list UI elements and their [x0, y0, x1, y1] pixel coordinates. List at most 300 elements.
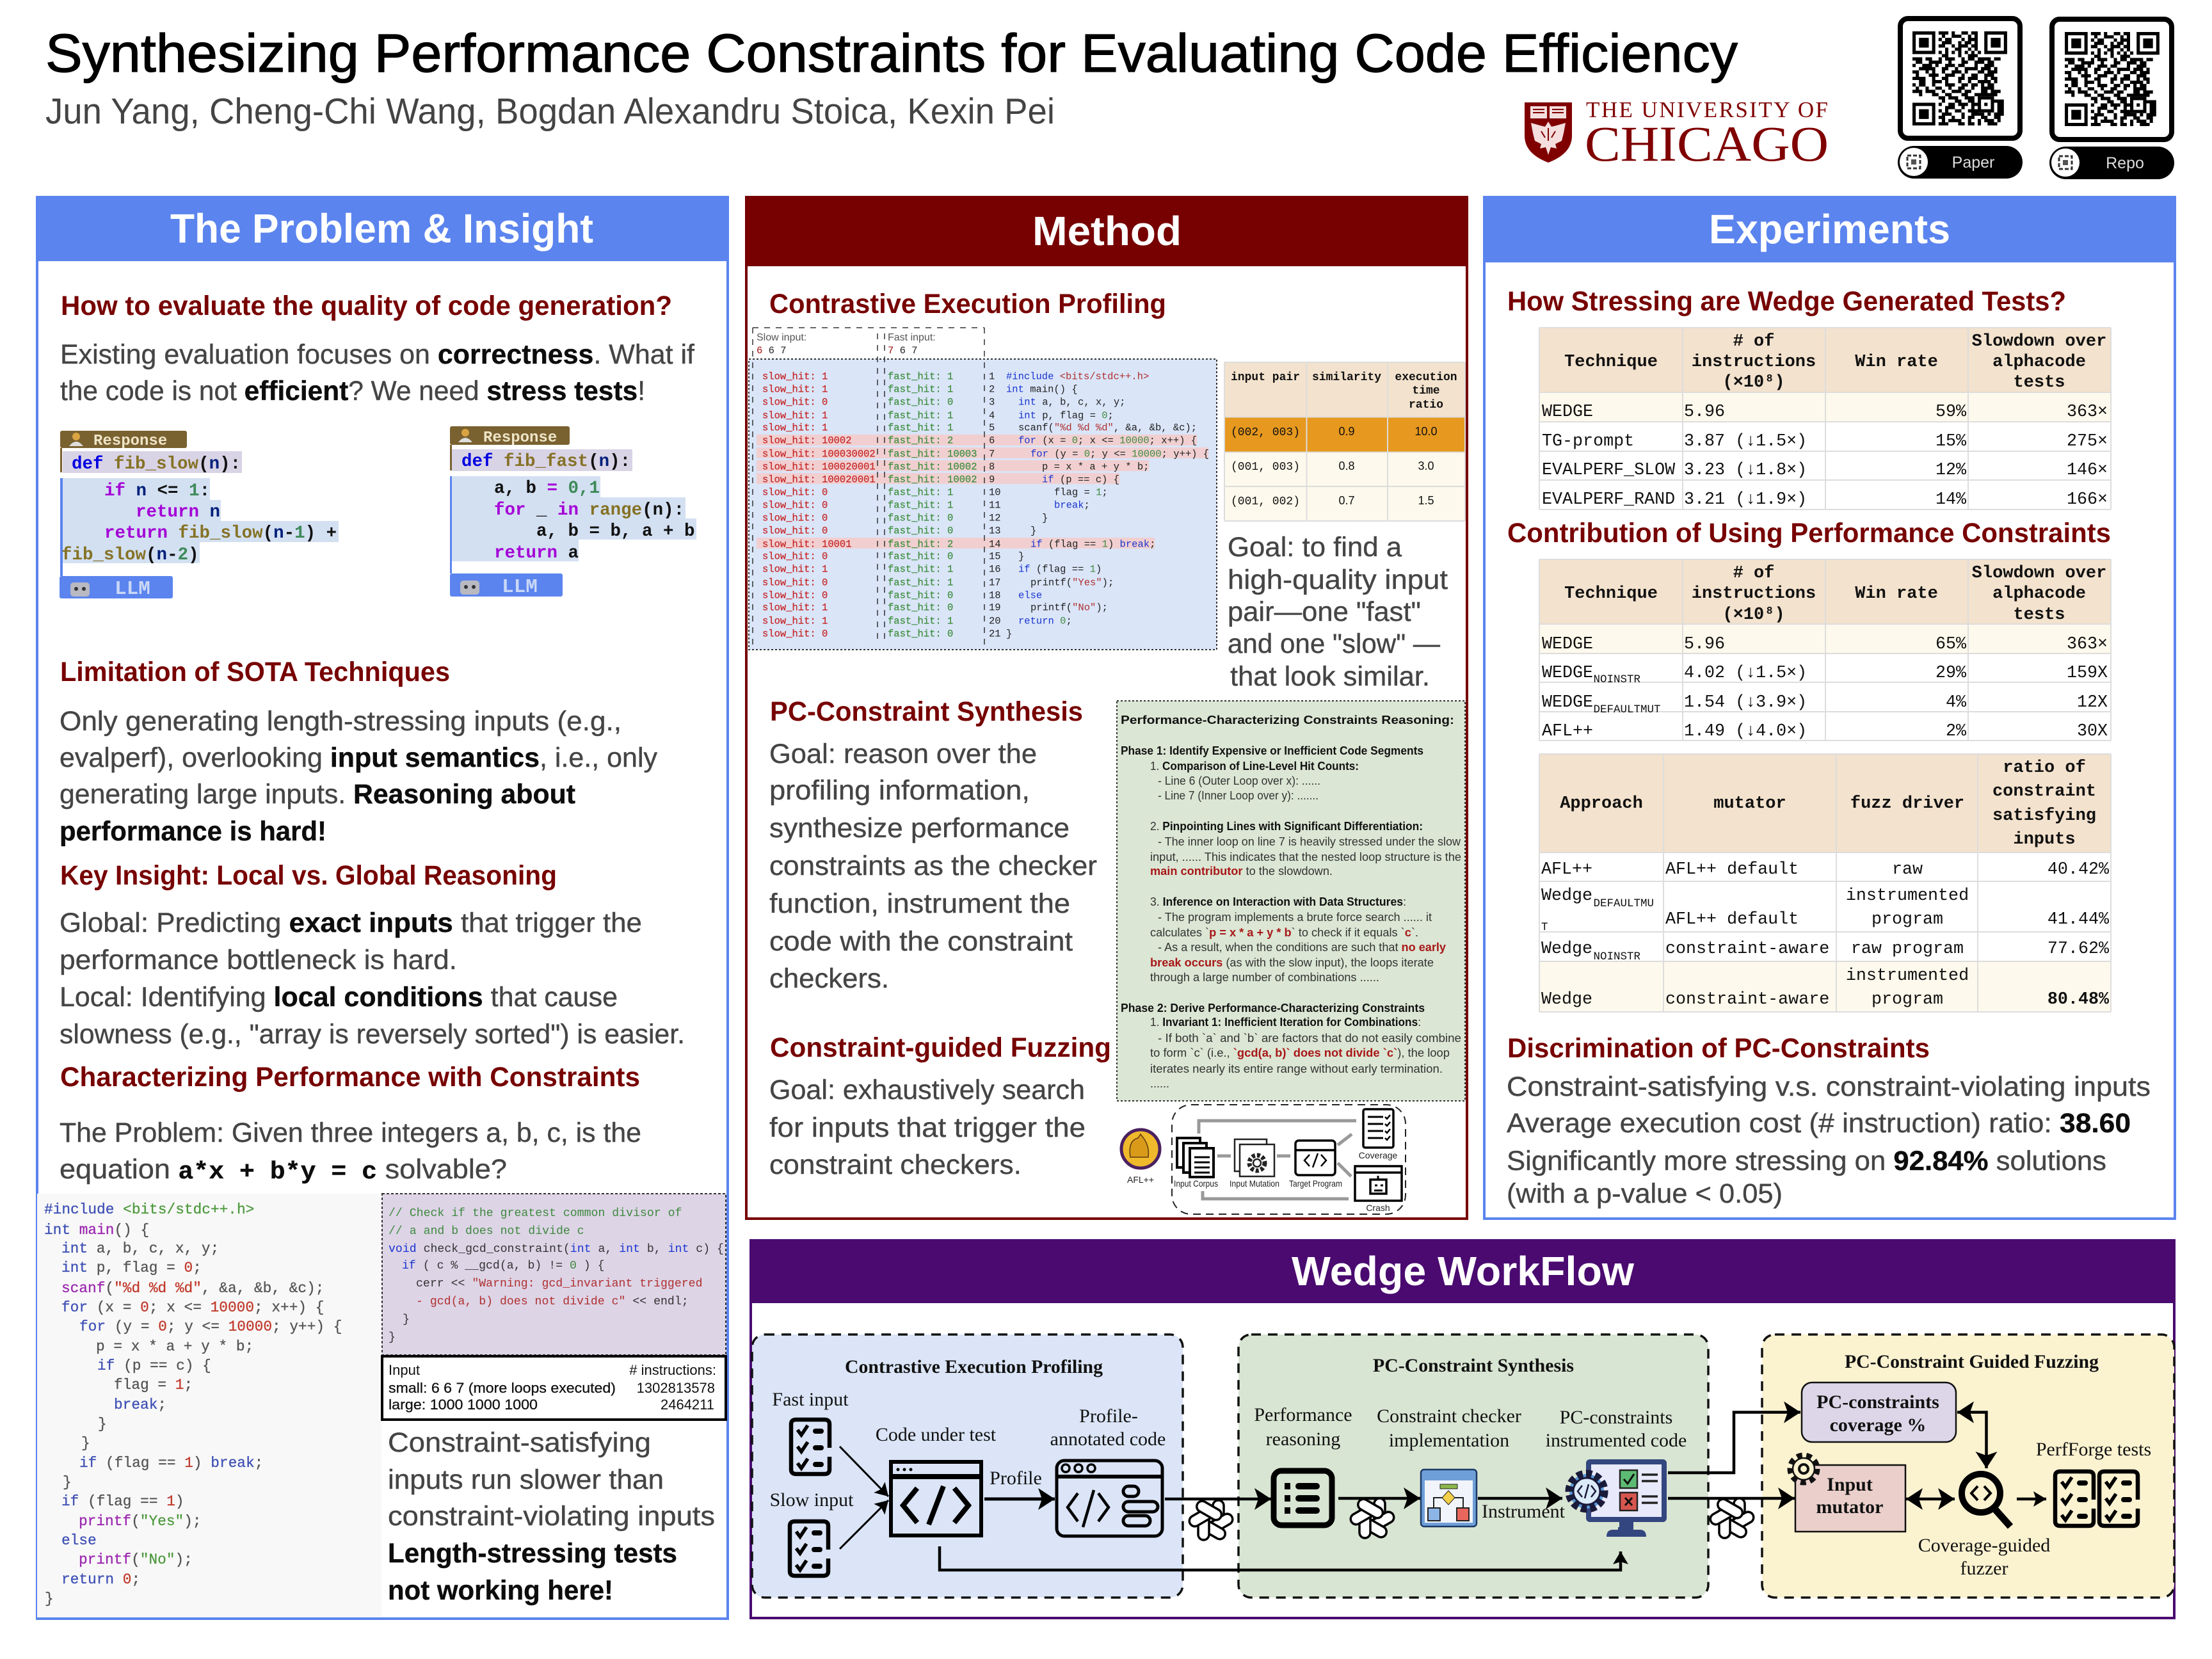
annotated source code: 9: [989, 474, 995, 485]
table: stressing results: [1539, 328, 2111, 509]
table: constraint satisfying ratio: instrumented: [1846, 966, 1969, 986]
table: input pair ranking: (002, 003): [1231, 426, 1300, 439]
fast hit counts: fast_hit: 0: [888, 550, 953, 562]
table: contribution results: 159X: [2067, 664, 2108, 683]
table: constraint satisfying ratio: 41.44%: [2048, 910, 2110, 929]
annotated source code: int a, b, c, x, y;: [1018, 397, 1125, 408]
panel: llm reasoning example: calculates `p = x * a + y * b` to check if it equals `c`.: [1150, 926, 1418, 939]
table: contribution results: WEDGE: [1542, 635, 1593, 654]
label: pc-constraints instrumented code: PC-constraints: [1560, 1407, 1672, 1428]
icon: coverage: [1359, 1109, 1398, 1160]
label: fast input: Fast input: [772, 1389, 849, 1410]
text block: constraint-satisfying: inputs run slower than: [388, 1464, 664, 1495]
panel: llm reasoning example: [1117, 701, 1465, 1101]
panel: llm reasoning example: - As a result, when the conditions are such that no early: [1158, 941, 1446, 954]
fast hit counts: fast_hit: 0: [888, 397, 953, 408]
label: profile: Profile: [990, 1468, 1042, 1489]
text block: synthesis goal: synthesize performance: [769, 813, 1070, 844]
icon: perfforge checklists: [2055, 1471, 2138, 1526]
code block: gcd constraint checker: - gcd(a, b) does not divide c" << endl;: [416, 1295, 689, 1308]
panel header: Experiments: [1709, 206, 1950, 252]
pill label: Repo: [2106, 154, 2144, 172]
annotated source code: 16: [989, 563, 1001, 575]
text block: discrimination results: Average execution cost (# instruction) ratio: 38.60: [1507, 1108, 2131, 1139]
heading: how to evaluate: How to evaluate the quality of code generation?: [61, 291, 672, 321]
table: constraint satisfying ratio: Approach: [1560, 794, 1643, 813]
code block: example program: else: [61, 1532, 97, 1549]
table: constraint satisfying ratio: 40.42%: [2048, 860, 2110, 879]
code block: gcd constraint checker: // a and b does not divide c: [389, 1225, 584, 1238]
profile: hit counts and code: 6 6 7: [757, 345, 787, 357]
code example: fib_fast: return a: [494, 543, 579, 563]
text block: goal: pair—one "fast": [1228, 597, 1421, 627]
table: contribution results: NOINSTR: [1594, 673, 1641, 686]
table: contribution results: tests: [2013, 605, 2065, 625]
logo: University of Chicago: [1525, 97, 1829, 172]
annotated source code: }: [1030, 525, 1036, 536]
table: contribution results: (×10⁸): [1722, 605, 1785, 625]
annotated source code: 15: [989, 550, 1001, 562]
annotated source code: 1: [989, 371, 995, 383]
feedback arrows: [1199, 1121, 1356, 1199]
annotated source code: printf("No");: [1030, 602, 1108, 613]
fast hit counts: fast_hit: 1: [888, 616, 953, 627]
table: input vs instructions: small: 6 6 7 (more loops executed): [389, 1380, 616, 1396]
panel: llm reasoning example: input, ...... This indicates that the nested loop structure is the: [1150, 851, 1461, 863]
panel: experiments: [1483, 196, 2176, 1219]
label: performance reasoning: reasoning: [1266, 1429, 1340, 1450]
text block: synthesis goal: code with the constraint: [769, 926, 1073, 957]
fast hit counts: fast_hit: 2: [888, 435, 953, 447]
table: contribution results: Slowdown over: [1972, 564, 2106, 583]
panel: llm reasoning example: - The program implements a brute force search ...... it: [1158, 911, 1432, 924]
text block: the problem: The Problem: Given three integers a, b, c, is the: [60, 1118, 641, 1148]
slow hit counts: slow_hit: 0: [762, 525, 828, 536]
text block: limitation: performance is hard!: [60, 816, 326, 847]
table: stressing results: Slowdown over: [1972, 332, 2106, 351]
table: input pair ranking: 3.0: [1418, 460, 1434, 472]
panel frame: [746, 197, 1467, 1219]
icon: annotated code window: [1057, 1461, 1162, 1536]
fast hit counts: fast_hit: 0: [888, 602, 953, 613]
annotated source code: flag = 1;: [1054, 486, 1108, 498]
icon: checker flow window: [1421, 1470, 1477, 1527]
table: stressing results: (×10⁸): [1722, 373, 1785, 392]
table: contribution results: Win rate: [1855, 584, 1938, 604]
table: stressing results: TG-prompt: [1542, 432, 1634, 451]
text block: limitation: [60, 706, 657, 847]
code block: gcd constraint checker: }: [389, 1331, 396, 1344]
code block: example program: printf("No");: [79, 1551, 193, 1568]
text block: global vs local: Global: Predicting exact inputs that trigger the: [60, 908, 642, 938]
table: stressing results: instructions: [1692, 353, 1816, 372]
slow hit counts: slow_hit: 1: [762, 384, 828, 396]
label: coverage-guided fuzzer: fuzzer: [1960, 1558, 2008, 1579]
QR pattern: [2065, 32, 2160, 126]
annotated source code: 3: [989, 397, 995, 408]
table: contribution results: 65%: [1936, 635, 1967, 654]
annotated source code: 5: [989, 422, 995, 434]
heading: pc-constraint synthesis: PC-Constraint Synthesis: [770, 696, 1083, 727]
label: code under test: Code under test: [876, 1424, 997, 1445]
fast hit counts: fast_hit: 1: [888, 371, 953, 383]
text block: the problem: equation a*x + b*y = c solvable?: [60, 1154, 507, 1186]
slow hit counts: slow_hit: 1: [762, 371, 828, 383]
code block: example program: int p, flag = 0;: [61, 1260, 202, 1276]
table: stressing results: 146×: [2067, 461, 2108, 480]
table: stressing results: Win rate: [1855, 353, 1938, 372]
table: constraint satisfying ratio: instrumented: [1846, 886, 1969, 906]
panel: llm reasoning example: 1. Comparison of Line-Level Hit Counts:: [1150, 760, 1359, 773]
panel: llm reasoning example: - If both `a` and `b` are factors that do not easily combine: [1158, 1032, 1461, 1045]
text block: correctness: Existing evaluation focuses on correctness. What if: [60, 339, 695, 370]
icon: llm step one: [1187, 1499, 1235, 1541]
code example: fib_slow: if n <= 1:: [104, 481, 210, 501]
table: contribution results: 1.54 (↓3.9×): [1684, 693, 1807, 712]
fast hit counts: fast_hit: 1: [888, 410, 953, 421]
code block: gcd constraint checker: // Check if the greatest common divisor of: [389, 1207, 682, 1220]
stage: pc-constraint synthesis: [1238, 1334, 1708, 1598]
arrow: coverage feedback: [1957, 1412, 1987, 1468]
code block: gcd constraint checker: if ( c % __gcd(a, b) != 0 ) {: [402, 1260, 605, 1272]
panel frame: [1484, 197, 2175, 1219]
code example: fib_fast: [450, 426, 696, 598]
annotated source code: 2: [989, 384, 995, 396]
arrow: code under test to instrumented: [940, 1546, 1621, 1570]
table: stressing results: 3.87 (↓1.5×): [1684, 432, 1807, 451]
panel header: [1483, 196, 2176, 262]
title: Synthesizing Performance Constraints for Evaluating Code Efficiency: [45, 23, 1738, 83]
fast hit counts: fast_hit: 0: [888, 525, 953, 536]
table: input pair ranking: time: [1412, 385, 1440, 397]
label: slow input: Slow input: [770, 1489, 854, 1511]
table: stressing results: alphacode: [1992, 353, 2086, 372]
annotated source code: 8: [989, 461, 995, 472]
text block: goal: that look similar.: [1230, 661, 1430, 692]
slow hit counts: slow_hit: 0: [762, 512, 828, 524]
code block: gcd constraint checker: cerr << "Warning: gcd_invariant triggered: [416, 1278, 703, 1290]
annotated source code: 20: [989, 616, 1001, 627]
label: coverage-guided fuzzer: [1918, 1535, 2050, 1579]
table: input pair ranking: execution: [1395, 371, 1457, 384]
slow input: Slow input:: [757, 332, 806, 343]
heading: constraint-guided fuzzing: Constraint-guided Fuzzing: [770, 1032, 1111, 1063]
table: contribution results: # of: [1733, 564, 1774, 583]
slow hit counts: slow_hit: 100020001: [762, 461, 876, 472]
table: constraint satisfying ratio: mutator: [1713, 794, 1786, 813]
icon: AFL++ logo: AFL++: [1127, 1174, 1154, 1185]
code example: fib_slow: fib_slow(n-2): [61, 545, 199, 565]
fast hit counts: [888, 371, 977, 640]
label: performance reasoning: Performance: [1254, 1404, 1352, 1425]
fast hit counts: fast_hit: 2: [888, 539, 953, 550]
label: checker implementation: implementation: [1389, 1430, 1509, 1451]
table: stressing results: 14%: [1936, 490, 1967, 509]
arrow: instrumented to coverage: [1668, 1412, 1800, 1473]
annotated source code: else: [1018, 590, 1042, 602]
LLM tag: LLM: [502, 576, 538, 598]
table: constraint satisfying ratio: NOINSTR: [1594, 950, 1641, 963]
icon: coverage: Coverage: [1359, 1150, 1398, 1160]
pill label: [1898, 146, 2023, 179]
slow hit counts: slow_hit: 0: [762, 397, 828, 408]
text block: limitation: evalperf), overlooking input semantics, i.e., only: [60, 742, 657, 773]
code block: example program: for (y = 0; y <= 10000; y++) {: [79, 1318, 342, 1335]
slow hit counts: slow_hit: 1: [762, 602, 828, 613]
text block: global vs local: slowness (e.g., "array is reversely sorted") is easier.: [60, 1019, 685, 1050]
table: contribution results: 4%: [1946, 693, 1967, 712]
fast hit counts: fast_hit: 10003: [888, 448, 977, 460]
slow hit counts: slow_hit: 10002: [762, 435, 852, 447]
table: input pair ranking: 10.0: [1415, 425, 1438, 438]
table: input pair ranking: 1.5: [1418, 494, 1434, 507]
code block: example program: if (flag == 1): [61, 1493, 184, 1510]
text block: goal: [1228, 532, 1448, 692]
label: profile-annotated code: Profile-: [1079, 1406, 1138, 1427]
annotated source code: printf("Yes");: [1030, 577, 1114, 589]
QR code: repo: [2049, 19, 2174, 179]
icon: code window: [891, 1462, 981, 1535]
icon: crash: Crash: [1366, 1203, 1390, 1213]
text block: synthesis goal: checkers.: [769, 963, 889, 994]
arrow: instrumented to mutator: [1668, 1497, 1795, 1500]
table: input pair ranking: (001, 002): [1231, 495, 1300, 508]
stage: pc-constraint guided fuzzing: [1762, 1334, 2174, 1598]
table: stressing results: WEDGE: [1542, 403, 1593, 422]
icon: slow input checklist: [790, 1521, 828, 1576]
annotated source code: 13: [989, 525, 1001, 536]
icon: shield crest: [1525, 102, 1572, 163]
text block: global vs local: Local: Identifying local conditions that cause: [60, 982, 618, 1013]
table: contribution results: Technique: [1564, 584, 1658, 604]
QR frame: [2052, 19, 2172, 140]
panel header: [749, 1239, 2176, 1303]
text block: correctness: [60, 339, 695, 406]
panel: llm reasoning example: - The inner loop on line 7 is heavily stressed under the slow: [1158, 835, 1461, 848]
icon: input corpus: [1174, 1138, 1218, 1189]
annotated source code: 12: [989, 512, 1001, 524]
panel: llm reasoning example: to form `c` (i.e., `gcd(a, b)` does not divide `c` ), the loop: [1150, 1046, 1450, 1059]
text block: synthesis goal: profiling information,: [769, 775, 1030, 806]
panel header: The Problem & Insight: [170, 205, 593, 252]
table: input pair ranking: 0.7: [1338, 494, 1355, 507]
table: constraint satisfying ratio: Wedge: [1541, 990, 1592, 1009]
text block: fuzzing goal: Goal: exhaustively search: [769, 1075, 1085, 1105]
code block: example program: flag = 1;: [114, 1377, 193, 1393]
code block: example program: return 0;: [61, 1571, 140, 1588]
box: pc-constraints coverage: PC-constraints: [1816, 1391, 1939, 1413]
pill label: Paper: [1952, 154, 1994, 172]
stage title: PC-Constraint Guided Fuzzing: [1845, 1351, 2099, 1372]
table: constraint satisfying ratio: DEFAULTMU: [1594, 897, 1654, 910]
annotated source code: 11: [989, 499, 1001, 511]
icon: magnifier fuzzer: [1962, 1474, 2010, 1527]
table: input vs instructions: # instructions:: [629, 1362, 716, 1378]
annotated source code: if (p == c) {: [1042, 474, 1119, 485]
panel: llm reasoning example: through a large number of combinations ......: [1150, 971, 1379, 984]
panel: llm reasoning example: - Line 7 (Inner Loop over y): .......: [1158, 789, 1318, 802]
panel frame: [37, 197, 728, 1619]
table: input pair ranking: (001, 003): [1231, 461, 1300, 474]
response tag: Response: [93, 433, 167, 450]
icon: crash: [1355, 1166, 1402, 1213]
panel header: Wedge WorkFlow: [1292, 1248, 1634, 1294]
text block: the problem: [60, 1118, 641, 1186]
annotated source code: int main() {: [1006, 384, 1078, 396]
table: input pair ranking: [1224, 362, 1465, 521]
icon: llm step three: [1708, 1497, 1756, 1539]
text block: synthesis goal: Goal: reason over the: [769, 739, 1037, 769]
table: stressing results: 275×: [2067, 432, 2108, 451]
table: stressing results: 59%: [1936, 403, 1967, 422]
code block: example program: int a, b, c, x, y;: [61, 1240, 219, 1257]
text block: constraint-satisfying: not working here!: [388, 1575, 613, 1606]
response tag: [60, 431, 187, 472]
text block: fuzzing goal: [769, 1075, 1086, 1180]
table: stressing results: EVALPERF_SLOW: [1542, 461, 1675, 480]
code block: example program: if (flag == 1) break;: [79, 1455, 263, 1471]
annotated source code: 4: [989, 410, 995, 421]
annotated source code: #include <bits/stdc++.h>: [1006, 371, 1149, 383]
code block: example program: for (x = 0; x <= 10000; x++) {: [61, 1299, 324, 1316]
annotated source code: return 0;: [1018, 616, 1072, 627]
slow hit counts: slow_hit: 1: [762, 422, 828, 434]
table: contribution results: 2%: [1946, 722, 1967, 741]
table: contribution results: 5.96: [1684, 635, 1725, 654]
fast hit counts: fast_hit: 0: [888, 512, 953, 524]
label: perfforge tests: PerfForge tests: [2036, 1439, 2151, 1460]
code block: example program: }: [81, 1435, 90, 1452]
icon: input mutation: [1230, 1139, 1279, 1189]
text block: synthesis goal: function, instrument the: [769, 888, 1070, 919]
table: stressing results: 12%: [1936, 461, 1967, 480]
panel: llm reasoning example: main contributor to the slowdown.: [1150, 865, 1333, 878]
annotated source code: scanf("%d %d %d", &a, &b, &c);: [1018, 422, 1197, 434]
table: constraint satisfying ratio: fuzz driver: [1850, 794, 1964, 813]
icon: input corpus: Input Corpus: [1174, 1178, 1218, 1189]
slow hit counts: slow_hit: 0: [762, 590, 828, 602]
annotated source code: }: [1042, 512, 1048, 524]
annotated source code: 17: [989, 577, 1001, 589]
fast hit counts: fast_hit: 1: [888, 577, 953, 589]
text block: discrimination results: Significantly more stressing on 92.84% solutions: [1507, 1146, 2106, 1176]
panel header: [36, 196, 729, 261]
table: constraint satisfying ratio: raw program: [1851, 940, 1964, 959]
table: contribution results: instructions: [1692, 584, 1816, 604]
code block: example program: }: [45, 1591, 54, 1607]
fast hit counts: fast_hit: 1: [888, 384, 953, 396]
code block: example program: int main() {: [44, 1222, 149, 1238]
heading: how stressing: How Stressing are Wedge Generated Tests?: [1507, 286, 2066, 317]
code block: example program: break;: [114, 1397, 166, 1413]
table: constraint satisfying ratio: inputs: [2013, 830, 2076, 849]
diagram: AFL++ fuzzing loop: [1172, 1105, 1406, 1214]
panel header: Method: [1032, 208, 1182, 254]
panel: wedge workflow: [749, 1239, 2176, 1618]
code example: fib_slow: [60, 431, 339, 600]
code example: fib_fast: def fib_fast(n):: [461, 452, 630, 472]
icon: fast input checklist: [791, 1420, 830, 1474]
table: stressing results: 15%: [1936, 432, 1967, 451]
LLM tag: [60, 576, 173, 600]
table: contribution results: [1539, 559, 2111, 741]
slow hit counts: slow_hit: 0: [762, 577, 828, 589]
slow hit counts: slow_hit: 0: [762, 486, 828, 498]
authors: Jun Yang, Cheng-Chi Wang, Bogdan Alexandru Stoica, Kexin Pei: [45, 91, 1055, 132]
annotated source code: p = x * a + y * b;: [1042, 461, 1149, 472]
table: contribution results: WEDGE: [1542, 693, 1593, 712]
heading: contrastive execution profiling: Contrastive Execution Profiling: [769, 289, 1166, 319]
box: pc-constraints coverage: [1802, 1382, 1956, 1442]
panel: llm reasoning example: Phase 1: Identify Expensive or Inefficient Code Segments: [1121, 744, 1423, 757]
profile: hit counts and code: [749, 328, 1217, 650]
annotated source code: int p, flag = 0;: [1018, 410, 1114, 421]
label: coverage-guided fuzzer: Coverage-guided: [1918, 1535, 2050, 1556]
response tag: Response: [483, 429, 557, 447]
code block: example program: #include <bits/stdc++.h>: [44, 1201, 254, 1218]
arrow: checker to instrumented: [1478, 1497, 1562, 1500]
annotated source code: 6: [989, 435, 995, 447]
logo text: the university of: THE UNIVERSITY OF: [1586, 97, 1828, 122]
table: constraint satisfying ratio: Wedge: [1541, 940, 1592, 959]
text block: discrimination results: (with a p-value < 0.05): [1507, 1178, 1783, 1209]
annotated source code: [989, 371, 1209, 640]
panel: llm reasoning example: Phase 2: Derive Performance-Characterizing Constraints: [1121, 1002, 1425, 1014]
table: contribution results: 12X: [2077, 693, 2108, 712]
panel: llm reasoning example: Performance-Characterizing Constraints Reasoning:: [1121, 714, 1454, 726]
arrow: fuzzer to tests: [2017, 1498, 2046, 1500]
arrow: reasoning to checker: [1338, 1497, 1420, 1500]
table: constraint satisfying ratio: AFL++ default: [1665, 910, 1799, 929]
heading: limitation of SOTA: Limitation of SOTA Techniques: [60, 657, 450, 687]
panel: llm reasoning example: iterates nearly its entire range without early termination.: [1150, 1062, 1443, 1075]
fast input: Fast input:: [888, 332, 936, 343]
table: constraint satisfying ratio: ratio of: [2003, 758, 2086, 778]
text block: global vs local: performance bottleneck is hard.: [60, 945, 457, 975]
code block: example program: }: [98, 1416, 107, 1432]
stage title: PC-Constraint Synthesis: [1373, 1355, 1574, 1376]
table: constraint satisfying ratio: satisfying: [1992, 806, 2096, 826]
label: profile-annotated code: [1050, 1406, 1166, 1450]
table: constraint satisfying ratio: Wedge: [1541, 886, 1592, 906]
panel: method: [745, 196, 1468, 1219]
heading: key insight: Key Insight: Local vs. Global Reasoning: [60, 860, 557, 891]
fast hit counts: fast_hit: 1: [888, 563, 953, 575]
table: contribution results: alphacode: [1992, 584, 2086, 604]
LLM tag: [450, 573, 563, 598]
code block: gcd constraint checker: }: [403, 1313, 410, 1326]
box: input mutator: mutator: [1816, 1496, 1883, 1518]
label: performance reasoning: [1254, 1404, 1352, 1450]
code example: fib_fast: for _ in range(n):: [494, 501, 684, 520]
text block: constraint-satisfying: constraint-violating inputs: [388, 1501, 715, 1532]
icon: reasoning list: [1274, 1471, 1332, 1525]
slow hit counts: slow_hit: 0: [762, 499, 828, 511]
table: constraint satisfying ratio: T: [1541, 921, 1548, 934]
text block: goal: Goal: to find a: [1228, 532, 1402, 563]
code block: example program: [37, 1194, 381, 1617]
slow hit counts: slow_hit: 10001: [762, 539, 852, 550]
panel: llm reasoning example: break occurs (as with the slow input), the loops iterate: [1150, 956, 1434, 969]
box: input mutator: [1795, 1465, 1905, 1532]
annotated source code: 21: [989, 629, 1001, 640]
panel: the problem and insight: [36, 196, 729, 1619]
table: contribution results: DEFAULTMUT: [1594, 703, 1661, 716]
code block: example program: if (p == c) {: [97, 1358, 211, 1374]
annotated source code: if (flag == 1): [1018, 563, 1102, 575]
fast hit counts: fast_hit: 0: [888, 590, 953, 602]
box: input mutator: Input: [1827, 1474, 1873, 1495]
